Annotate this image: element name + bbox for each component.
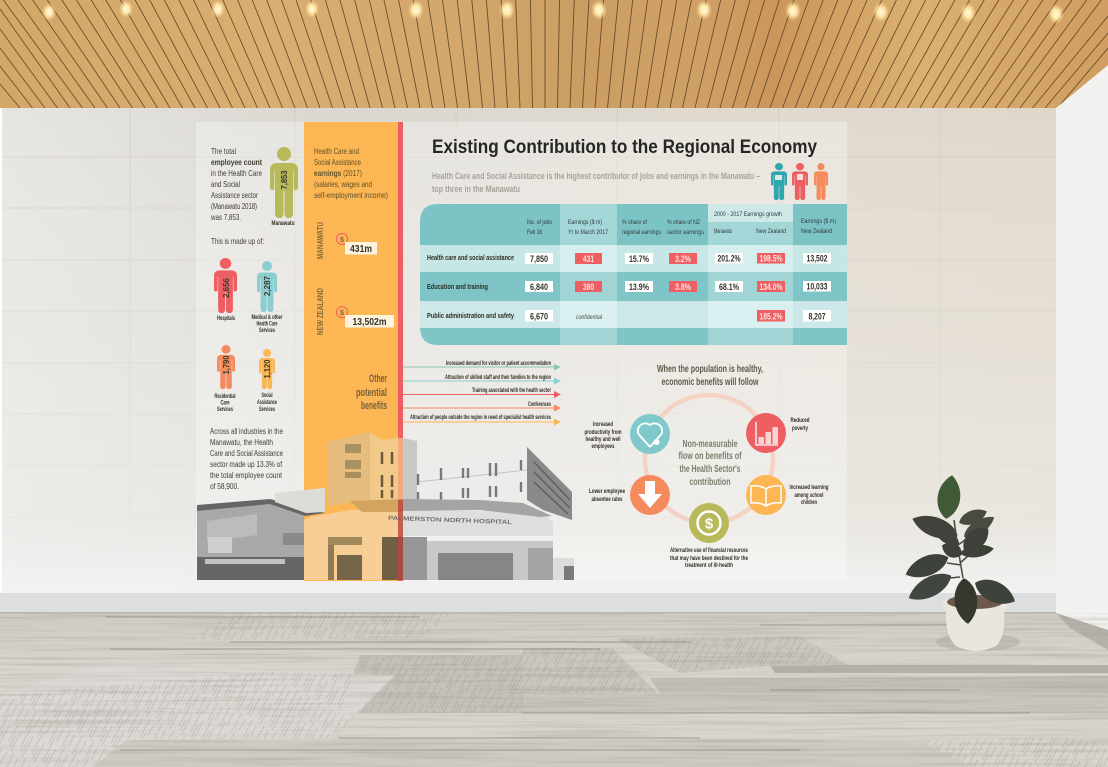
- panel: employee counts (left column): [210, 147, 298, 491]
- label: increased productivity: healthy and well: [586, 437, 621, 443]
- ceiling lights: [42, 0, 1064, 24]
- table row: health care and social assistance: 198.5%: [760, 254, 782, 264]
- panel: orange earnings column: [304, 122, 398, 581]
- text: total employee count: was 7,853.: [210, 213, 241, 222]
- icon: residential care services figure: [214, 345, 236, 413]
- label: New Zealand: NEW ZEALAND: [316, 288, 325, 335]
- text: total employee count: The total: [211, 147, 236, 156]
- table background: [420, 204, 847, 345]
- subtitle: [432, 171, 760, 194]
- table row: public administration and safety: Public administration and safety: [427, 311, 515, 320]
- label: increased productivity: productivity from: [584, 430, 622, 436]
- arrow: skilled staff: [403, 375, 561, 384]
- icon: medical and other health care services figure: Medical & other: [252, 315, 283, 321]
- arrow: specialist health services: Attraction of people outside the region in need of specialist health services: [410, 415, 551, 421]
- stat: Manawatu earnings: 431m: [350, 244, 372, 255]
- arrow: visitor accommodation: Increased demand for visitor or patient accommodation: [446, 361, 551, 367]
- icon: residential care services figure: Services: [217, 407, 233, 413]
- table row: education and training: 6,840: [530, 282, 548, 292]
- table header labels: New Zealand: [801, 228, 832, 235]
- heading: other potential benefits: [356, 373, 387, 412]
- icon: medical and other health care services figure: Services: [259, 328, 275, 334]
- table row: education and training: 134.0%: [760, 282, 782, 292]
- text: total employee count: and Social: [211, 180, 240, 189]
- table row: health care and social assistance: 15.7%: [629, 254, 649, 264]
- label: Manawatu: MANAWATU: [316, 222, 325, 259]
- text: total employee count: (Manawatu 2018): [211, 202, 257, 211]
- icon: dollar coin, alternative use of resources: [689, 503, 729, 543]
- building sign text: PALMERSTON NORTH HOSPITAL: [388, 516, 513, 526]
- text: ring centre label: contribution: [690, 477, 730, 488]
- red divider strip: [398, 122, 403, 581]
- text: earnings description: Social Assistance: [314, 158, 361, 167]
- stat: Manawatu earnings: [336, 234, 377, 255]
- label: alternative use of financial resources: [670, 548, 749, 569]
- stat: New Zealand earnings: $: [340, 308, 345, 317]
- table row: health care and social assistance: 201.2%: [718, 254, 740, 264]
- icon: social assistance services figure: Services: [259, 407, 275, 413]
- icon: residential care services figure: 1,790: [222, 355, 231, 374]
- text: share across all industries: of 58,900.: [210, 482, 239, 491]
- text: share across all industries: [210, 427, 283, 491]
- table row: health care and social assistance: 3.2%: [675, 254, 691, 264]
- label: increased productivity: Increased: [593, 422, 613, 428]
- icon: dollar coin, alternative use of resources: $: [705, 516, 714, 532]
- table header labels: New Zealand: [756, 228, 786, 235]
- stat: New Zealand earnings: [336, 306, 394, 328]
- table row: education and training: [427, 281, 831, 292]
- title: Existing Contribution to the Regional Economy: [432, 137, 817, 158]
- table row: health care and social assistance: [427, 253, 831, 264]
- icon: medical and other health care services figure: 2,287: [263, 275, 272, 296]
- text: ring centre label: flow on benefits of: [678, 451, 742, 462]
- table header labels: Earnings ($ m): [568, 219, 602, 226]
- infographic sheet backing: [196, 122, 847, 581]
- label: reduced poverty: [790, 418, 810, 432]
- icon: heart, increased productivity: [630, 414, 670, 454]
- text: share across all industries: sector made up 13.3% of: [210, 460, 283, 469]
- table row: health care and social assistance: 431: [583, 254, 594, 264]
- stat: New Zealand earnings: 13,502m: [352, 317, 387, 328]
- table row: public administration and safety: 6,670: [530, 312, 548, 322]
- icon: down arrow, lower absentee rates: [630, 475, 670, 515]
- text: earnings description: self-employment income): [314, 191, 388, 200]
- panel: earnings content on orange column: [314, 147, 394, 412]
- text: share across all industries: Manawatu, the Health: [210, 438, 273, 447]
- heading: other potential benefits: potential: [356, 387, 387, 399]
- table header labels: 2000 - 2017 Earnings growth: [714, 211, 782, 218]
- icon: bar chart, reduced poverty: [746, 413, 786, 453]
- table row: public administration and safety: [427, 310, 831, 322]
- table header labels: % share of NZ: [667, 219, 700, 226]
- heading: other potential benefits: Other: [369, 373, 387, 385]
- text: share across all industries: Care and Social Assistance: [210, 449, 283, 458]
- label: increased productivity: employees: [592, 444, 615, 450]
- heading: when the population is healthy: When the population is healthy,: [657, 364, 763, 375]
- table row: education and training: 68.1%: [719, 282, 739, 292]
- icon: hospitals figure: Hospitals: [217, 316, 235, 322]
- arrow: training: [403, 388, 561, 398]
- text: share across all industries: the total employee count: [210, 471, 283, 480]
- icon: Manawatu person figure: Manawatu: [272, 221, 295, 227]
- icon: medical and other health care services figure: [252, 261, 283, 334]
- table header labels: Manawatu: [714, 228, 732, 235]
- room: right side wall: [1056, 65, 1108, 630]
- label: reduced poverty: Reduced: [790, 418, 810, 424]
- table row: education and training: 380: [583, 282, 594, 292]
- icon: healthcare workers: [771, 163, 828, 200]
- icon: residential care services figure: Residential: [214, 394, 236, 400]
- heading: when the population is healthy: [657, 364, 763, 388]
- table header labels: Feb 18: [527, 229, 542, 236]
- table header labels: [527, 211, 836, 236]
- label: alternative use of financial resources: Alternative use of financial resources: [670, 548, 748, 554]
- room: herringbone wood floor: [0, 612, 1108, 767]
- table row: education and training: 13.9%: [629, 282, 649, 292]
- label: lower absentee rates: absentee rates: [592, 497, 623, 503]
- text: total employee count: Assistance sector: [211, 191, 258, 200]
- label: alternative use of financial resources: that may have been destined for the: [670, 556, 749, 562]
- table row: education and training: 10,033: [806, 282, 828, 292]
- label: increased productivity: [584, 422, 622, 450]
- icon: social assistance services figure: 1,120: [263, 359, 272, 378]
- arrow: training: Training associated with the health sector: [472, 388, 551, 394]
- table row: public administration and safety: 185.2%: [760, 312, 782, 322]
- chart: non-measurable benefits ring: [584, 395, 829, 569]
- arrow: specialist health services: [403, 415, 561, 426]
- arrow: visitor accommodation: [403, 361, 561, 370]
- photo: Palmerston North Hospital building: [197, 432, 574, 580]
- icon: hospitals figure: 2,656: [222, 277, 231, 298]
- arrow: conferences: [403, 402, 561, 412]
- icon: Manawatu person figure: 7,853: [280, 170, 289, 190]
- table row: education and training: 3.8%: [675, 282, 691, 292]
- label: increased learning: children: [801, 500, 817, 506]
- icon: hospitals figure: [214, 258, 237, 322]
- table row: public administration and safety: 8,207: [808, 312, 826, 322]
- table row: health care and social assistance: 7,850: [530, 254, 548, 264]
- text: earnings description: earnings (2017): [314, 169, 362, 178]
- arrow: skilled staff: Attraction of skilled staff and their families to the region: [445, 375, 551, 381]
- label: lower absentee rates: [589, 489, 626, 503]
- text: total employee count: in the Health Care: [211, 169, 262, 178]
- table row: education and training: Education and training: [427, 282, 488, 291]
- arrow: conferences: Conferences: [528, 402, 551, 408]
- icon: social assistance services figure: Assistance: [257, 400, 277, 406]
- icon: medical and other health care services figure: Health Care: [256, 322, 278, 328]
- icon: social assistance services figure: [257, 349, 277, 413]
- panel: data table: [420, 204, 847, 345]
- icon: residential care services figure: Care: [220, 400, 230, 406]
- chart: other potential benefits arrows: [403, 361, 561, 426]
- text: total employee count: employee count: [211, 158, 262, 167]
- table row: health care and social assistance: Health care and social assistance: [427, 253, 514, 262]
- text: total employee count: [210, 147, 262, 222]
- heading: when the population is healthy: economic benefits will follow: [662, 377, 759, 388]
- label: lower absentee rates: Lower employee: [589, 489, 626, 495]
- text: earnings description: (salaries, wages and: [314, 180, 372, 189]
- table header labels: Earnings ($ m): [801, 218, 836, 225]
- subtitle: Health Care and Social Assistance is the highest contributor of jobs and earnings in the Manawatu –: [432, 171, 760, 181]
- table header labels: No. of jobs: [527, 219, 553, 226]
- room: wall background: [0, 100, 1056, 615]
- text: share across all industries: Across all industries in the: [210, 427, 283, 436]
- label: increased learning: among school: [794, 493, 824, 499]
- table header labels: regional earnings: [622, 229, 662, 236]
- label: alternative use of financial resources: treatment of ill-health: [685, 563, 733, 569]
- room: wooden ceiling with slats: [0, 0, 1108, 108]
- text: ring centre label: [678, 439, 742, 488]
- label: increased learning: [790, 485, 829, 506]
- heading: other potential benefits: benefits: [361, 400, 387, 412]
- table row: health care and social assistance: 13,502: [806, 254, 828, 264]
- text: made up of: This is made up of:: [211, 237, 264, 246]
- subtitle: top three in the Manawatu: [432, 184, 520, 194]
- text: ring centre label: the Health Sector's: [680, 464, 741, 475]
- stat: Manawatu earnings: $: [340, 235, 345, 244]
- table header labels: Yr to March 2017: [568, 229, 608, 236]
- text: earnings description: Health Care and: [314, 147, 359, 156]
- icon: open book, increased learning: [746, 475, 786, 515]
- text: earnings description: [314, 147, 388, 200]
- table row: public administration and safety: confidential: [576, 315, 603, 321]
- table header labels: % share of: [622, 219, 647, 226]
- table header labels: sector earnings: [667, 229, 705, 236]
- decoration: potted rubber plant: [902, 474, 1020, 651]
- label: increased learning: Increased learning: [790, 485, 829, 491]
- label: reduced poverty: poverty: [792, 426, 808, 432]
- icon: Manawatu person figure: [270, 147, 298, 227]
- icon: social assistance services figure: Social: [262, 393, 273, 399]
- text: ring centre label: Non-measurable: [682, 439, 738, 450]
